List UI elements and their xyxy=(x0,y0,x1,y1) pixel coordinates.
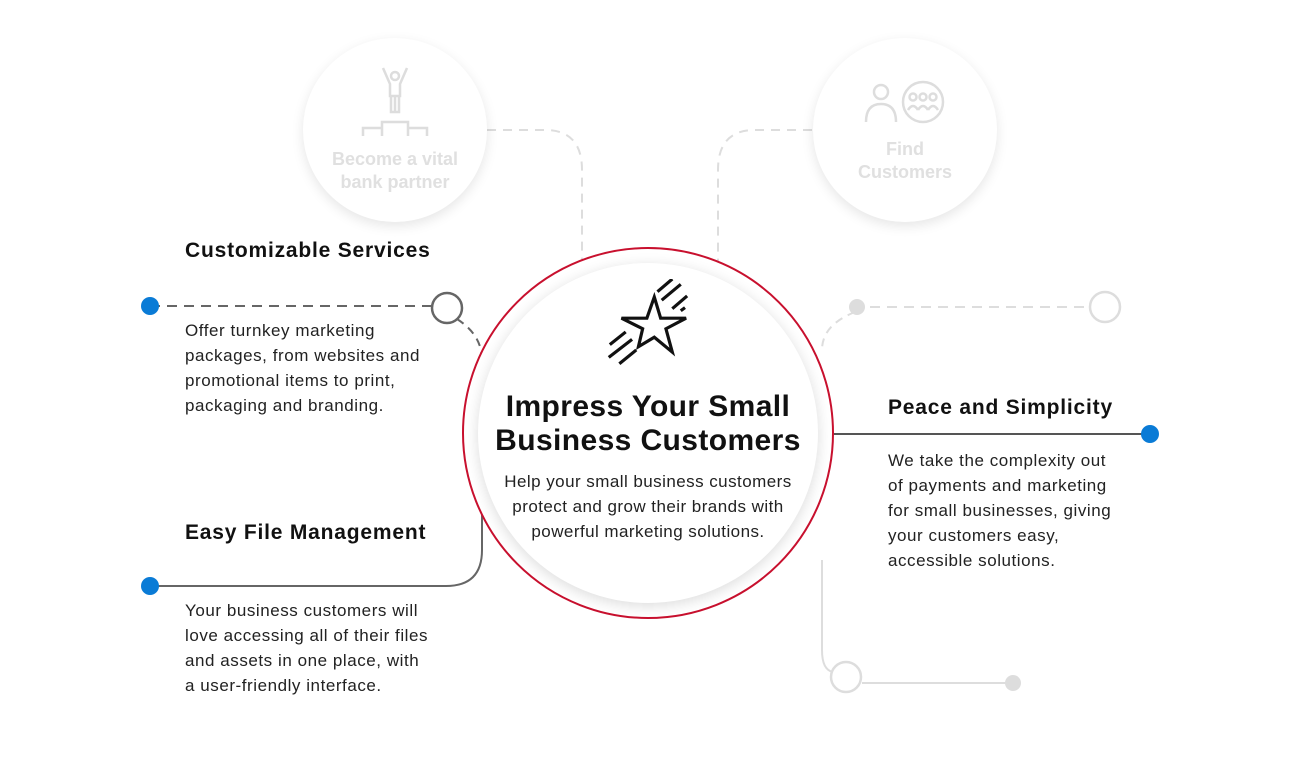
central description: protect and grow their brands with xyxy=(512,497,784,516)
central title xyxy=(495,390,801,457)
block: Easy File Management: love accessing all of their files xyxy=(185,626,428,645)
faded circle: Find Customers: Customers xyxy=(858,162,952,182)
icon: winner podium xyxy=(362,68,428,136)
faded circle: Become a vital bank partner xyxy=(303,38,487,222)
block: Peace and Simplicity: We take the complexity out xyxy=(888,451,1106,470)
block: Customizable Services xyxy=(185,239,431,415)
central circle xyxy=(462,247,834,619)
block: Peace and Simplicity: your customers easy, xyxy=(888,526,1059,545)
central description: powerful marketing solutions. xyxy=(531,522,765,541)
faded circle: Find Customers: Find xyxy=(886,139,924,159)
block: Peace and Simplicity: Peace and Simplicity xyxy=(888,396,1113,419)
faded circle: Become a vital bank partner: bank partner xyxy=(340,172,450,192)
block: Customizable Services: Customizable Services xyxy=(185,239,431,262)
block: Customizable Services: packages, from websites and xyxy=(185,346,420,365)
block: Customizable Services: packaging and branding. xyxy=(185,396,384,415)
faded circle: Become a vital bank partner: Become a vital xyxy=(332,149,458,169)
block: Easy File Management: and assets in one place, with xyxy=(185,651,419,670)
central title: Impress Your Small xyxy=(506,390,790,423)
block: Easy File Management: Your business customers will xyxy=(185,601,418,620)
central description xyxy=(504,472,792,541)
block: Easy File Management: a user-friendly interface. xyxy=(185,676,382,695)
block: Peace and Simplicity: for small businesses, giving xyxy=(888,501,1111,520)
faded circle: Find Customers xyxy=(813,38,997,222)
block: Customizable Services: Offer turnkey marketing xyxy=(185,321,375,340)
central title: Business Customers xyxy=(495,424,801,457)
central description: Help your small business customers xyxy=(504,472,792,491)
block: Peace and Simplicity xyxy=(888,396,1113,570)
block: Peace and Simplicity: accessible solutions. xyxy=(888,551,1055,570)
icon: shooting star xyxy=(608,279,688,365)
block: Customizable Services: promotional items to print, xyxy=(185,371,395,390)
icon: people xyxy=(864,80,944,124)
block: Easy File Management xyxy=(185,521,428,695)
block: Peace and Simplicity: of payments and marketing xyxy=(888,476,1107,495)
block: Easy File Management: Easy File Management xyxy=(185,521,426,544)
